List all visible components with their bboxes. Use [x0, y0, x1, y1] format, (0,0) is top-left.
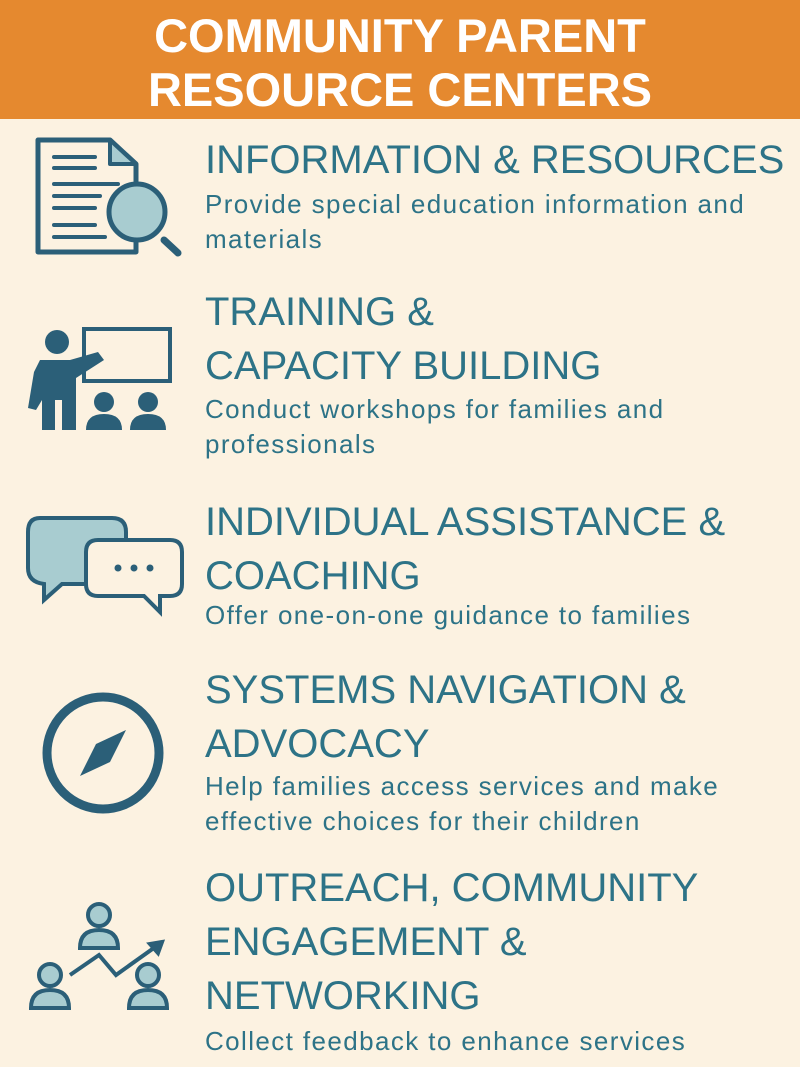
- heading: information: INFORMATION & RESOURCES: [205, 138, 784, 182]
- heading: systems: SYSTEMS NAVIGATION &: [205, 668, 686, 712]
- heading: outreach: [205, 866, 698, 1018]
- text: systems: effective choices for their children: [205, 806, 641, 836]
- text: training: professionals: [205, 429, 376, 459]
- heading: training: CAPACITY BUILDING: [205, 344, 601, 388]
- heading: training: [205, 290, 601, 388]
- title: [148, 9, 652, 116]
- text: training: [205, 394, 664, 459]
- heading: systems: ADVOCACY: [205, 722, 430, 766]
- heading: individual: [205, 500, 725, 598]
- text: information: materials: [205, 224, 323, 254]
- text: information: Provide special education information and: [205, 189, 745, 219]
- icon: chat bubbles: [26, 516, 184, 617]
- text: training: Conduct workshops for families and: [205, 394, 664, 424]
- heading: outreach: OUTREACH, COMMUNITY: [205, 866, 698, 910]
- icon: network: [29, 902, 169, 1010]
- header: [0, 0, 800, 119]
- text: systems: Help families access services and make: [205, 771, 719, 801]
- text: information: [205, 189, 745, 254]
- heading: outreach: ENGAGEMENT &: [205, 920, 527, 964]
- heading: outreach: NETWORKING: [205, 974, 481, 1018]
- icon: compass: [42, 692, 164, 814]
- heading: systems: [205, 668, 686, 766]
- title: COMMUNITY PARENT: [154, 9, 646, 62]
- icon: trainer: [28, 327, 172, 430]
- heading: training: TRAINING &: [205, 290, 434, 334]
- icon: document with magnifier: [36, 138, 182, 256]
- heading: individual: INDIVIDUAL ASSISTANCE &: [205, 500, 725, 544]
- heading: individual: COACHING: [205, 554, 421, 598]
- text: outreach: Collect feedback to enhance services: [205, 1026, 686, 1056]
- text: individual: Offer one-on-one guidance to families: [205, 600, 691, 630]
- title: RESOURCE CENTERS: [148, 63, 652, 116]
- text: systems: [205, 771, 719, 836]
